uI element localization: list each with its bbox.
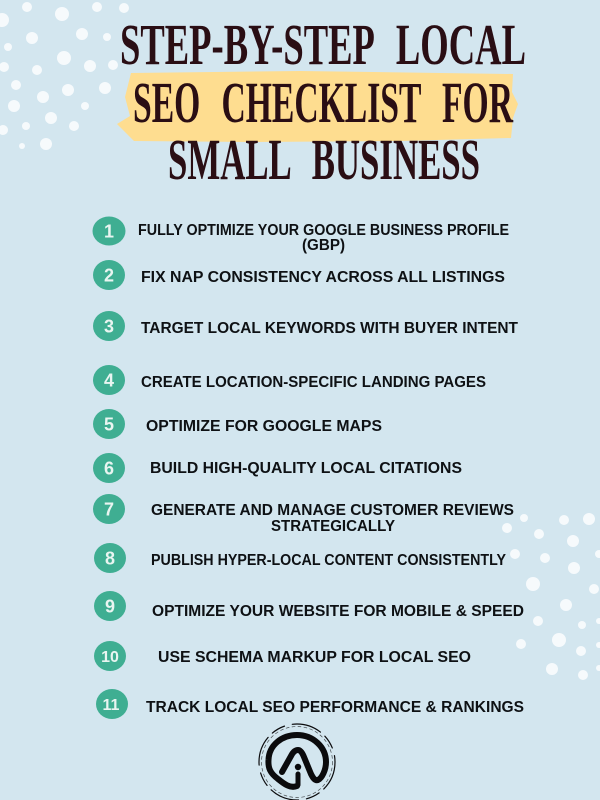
item 5: 5 — [104, 414, 114, 434]
item 9 — [94, 591, 524, 621]
item 4 — [93, 365, 486, 395]
item 11 — [96, 689, 524, 719]
item 1: (GBP) — [302, 237, 345, 254]
item 6: 6 — [104, 458, 114, 478]
item 9: 9 — [105, 596, 115, 616]
item 8: 8 — [105, 548, 115, 568]
item 7: 7 — [104, 500, 114, 520]
item 10: USE SCHEMA MARKUP FOR LOCAL SEO — [158, 649, 471, 666]
item 11: 11 — [103, 697, 120, 714]
item 2 — [93, 260, 505, 290]
item 1 — [92, 216, 509, 254]
icon: logo — [259, 724, 335, 800]
item 4: 4 — [104, 370, 114, 390]
item 10: 10 — [101, 649, 119, 666]
item 2: FIX NAP CONSISTENCY ACROSS ALL LISTINGS — [141, 269, 505, 286]
item 5: OPTIMIZE FOR GOOGLE MAPS — [146, 418, 382, 435]
item 8 — [94, 543, 506, 573]
item 3: 3 — [104, 316, 114, 336]
item 5 — [93, 409, 382, 439]
item 10 — [94, 641, 471, 671]
item 4: CREATE LOCATION-SPECIFIC LANDING PAGES — [141, 374, 486, 391]
item 6 — [93, 453, 462, 483]
item 7 — [93, 494, 514, 535]
item 6: BUILD HIGH-QUALITY LOCAL CITATIONS — [150, 460, 462, 477]
item 9: OPTIMIZE YOUR WEBSITE FOR MOBILE & SPEED — [152, 603, 524, 620]
item 7: STRATEGICALLY — [271, 518, 395, 535]
item 2: 2 — [104, 266, 114, 286]
item 7: GENERATE AND MANAGE CUSTOMER REVIEWS — [151, 502, 514, 519]
yellow brush highlight — [117, 71, 518, 142]
item 11: TRACK LOCAL SEO PERFORMANCE & RANKINGS — [146, 699, 524, 716]
item 1: FULLY OPTIMIZE YOUR GOOGLE BUSINESS PROFILE — [138, 222, 509, 239]
item 8: PUBLISH HYPER-LOCAL CONTENT CONSISTENTLY — [151, 552, 506, 569]
decorative dots: right side — [502, 513, 600, 680]
item 3: TARGET LOCAL KEYWORDS WITH BUYER INTENT — [141, 320, 518, 337]
item 3 — [93, 311, 518, 341]
item 1: 1 — [104, 222, 114, 242]
title — [120, 12, 526, 192]
decorative dots: top left — [0, 2, 129, 150]
